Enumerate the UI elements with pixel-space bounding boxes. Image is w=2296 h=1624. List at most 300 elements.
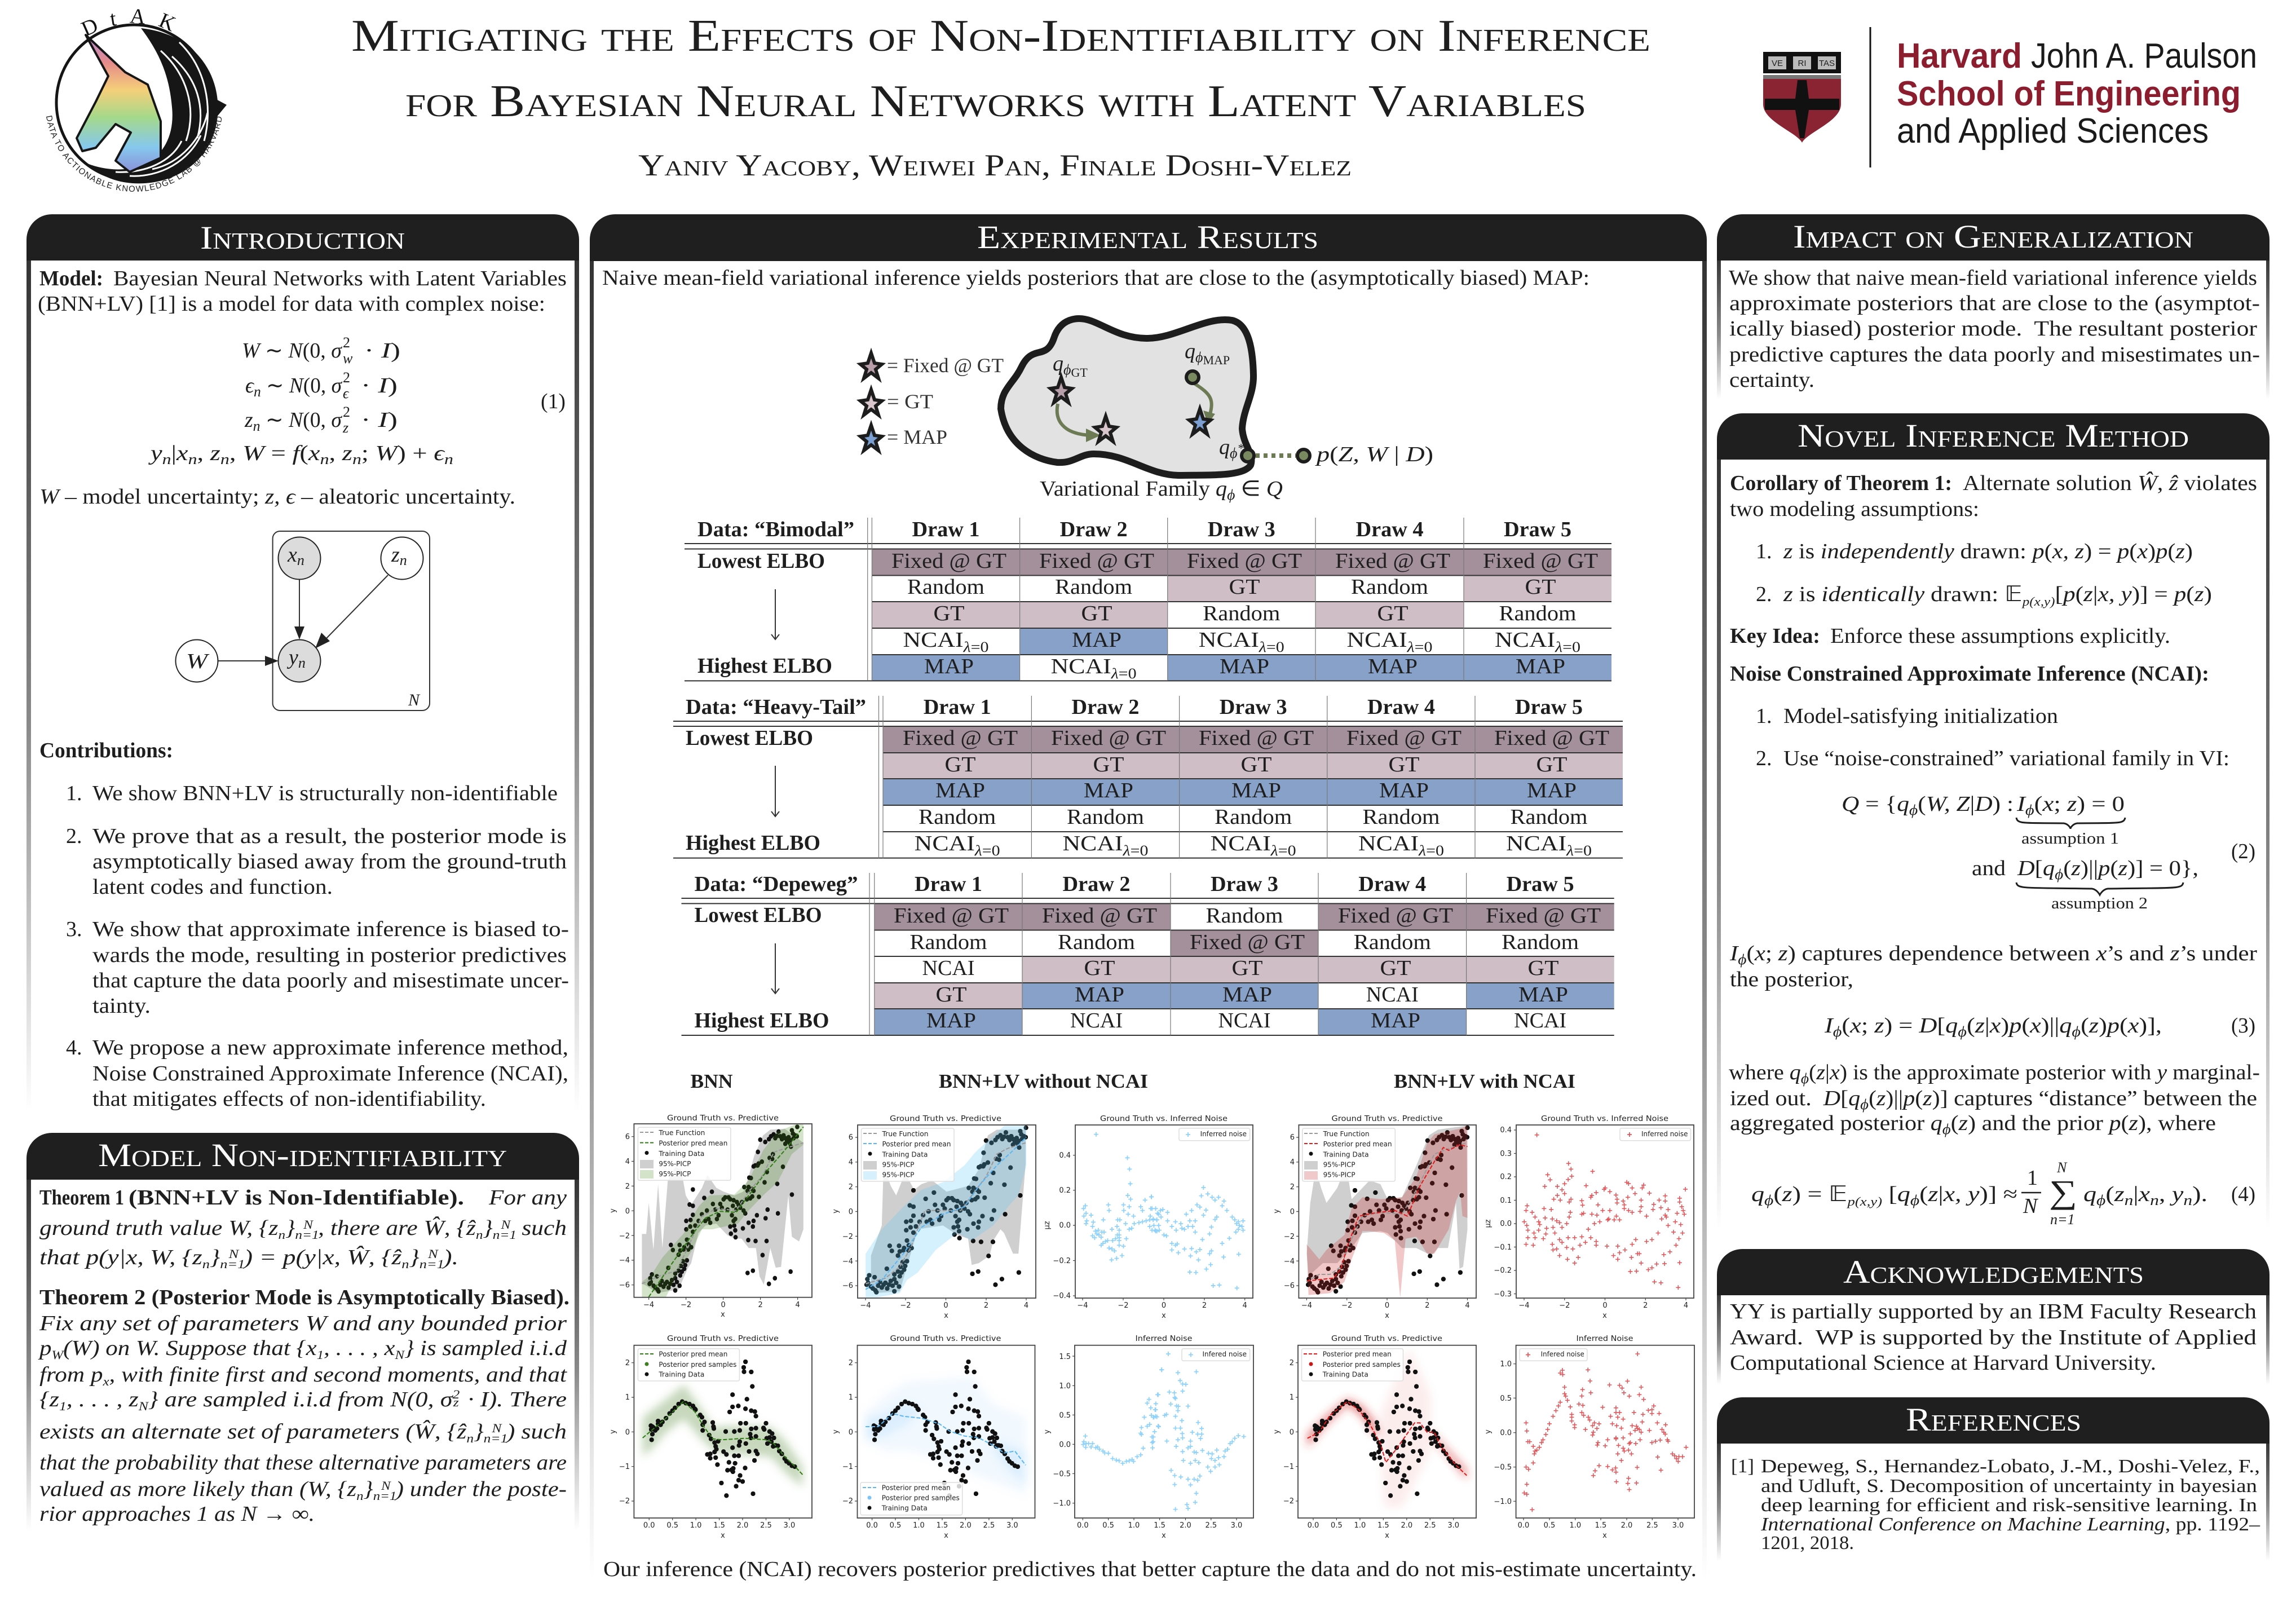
contributions list: asymptotically biased away from the ground-truth <box>92 850 567 873</box>
legend: Inferred noise <box>1641 1129 1688 1138</box>
legend <box>1179 1128 1250 1141</box>
theorem 1: n=1 <box>420 1257 444 1271</box>
theorem 2: ) such <box>505 1420 567 1444</box>
table: Depeweg: GT <box>1231 956 1263 980</box>
chart: with NCAI Depeweg predictive: Ground Truth vs. Predictive <box>1331 1334 1442 1343</box>
contributions list: Noise Constrained Approximate Inference (NCAI), <box>92 1062 568 1085</box>
reference entry: and Udluft, S. Decomposition of uncertainty in bayesian <box>1761 1476 2257 1497</box>
distance text: ( <box>1951 1111 1959 1135</box>
equation 1: ϵ <box>245 374 255 398</box>
table: Bimodal: Random <box>1203 602 1280 625</box>
table: Bimodal: Fixed @ GT <box>1187 549 1302 573</box>
contributions list: tainty. <box>92 994 151 1018</box>
graphical model: W <box>186 650 210 673</box>
equation 4: ϕ <box>1764 1192 1773 1208</box>
equation 4: (4) <box>2231 1182 2255 1206</box>
chart group headings: BNN <box>690 1070 733 1092</box>
mutual information text: the posterior, <box>1730 968 1853 991</box>
contributions list: that capture the data poorly and misestimate uncer- <box>92 969 569 992</box>
table: Depeweg: GT <box>936 983 966 1007</box>
table: Bimodal: MAP <box>1072 628 1121 652</box>
theorem 1: n <box>202 1257 210 1271</box>
diagram labels <box>1040 339 1433 503</box>
graphical model <box>176 531 430 710</box>
theorem 2: , . . . , z <box>67 1388 139 1411</box>
equation 1: W = f(x <box>242 442 318 465</box>
equation 1: (1) <box>541 390 566 413</box>
chart: BNN heavy-tail predictive <box>609 1114 812 1319</box>
equation 1: | <box>171 442 176 465</box>
mutual information text: x; z) captures dependence between x’s and z’s under <box>1755 942 2248 965</box>
table: Bimodal: NCAI <box>903 628 955 652</box>
table: Heavy-Tail: MAP <box>1084 779 1133 802</box>
table: Bimodal: Fixed @ GT <box>1039 549 1154 573</box>
diagram labels: p(Z, W | D) <box>1314 443 1433 466</box>
chart: BNN+LV without NCAI heavy-tail predictive: Ground Truth vs. Predictive <box>890 1114 1001 1123</box>
legend <box>1302 1128 1395 1181</box>
reference entry: deep learning for efficient and risk-sensitive learning. In <box>1761 1495 2257 1516</box>
theorem 2: rior approaches 1 as N → ∞. <box>39 1502 315 1526</box>
equation 1: , <box>229 442 242 465</box>
table: Heavy-Tail: Fixed @ GT <box>1346 726 1462 750</box>
equation 4: 1 <box>2027 1166 2038 1190</box>
contributions heading: Contributions: <box>39 739 173 762</box>
table: Depeweg: Draw 4 <box>1358 872 1426 896</box>
contributions list <box>66 782 569 1111</box>
authors: Yaniv Yacoby, Weiwei Pan, Finale Doshi-Velez <box>638 148 1352 182</box>
theorem 1: N <box>303 1217 314 1232</box>
school name <box>1897 37 2257 151</box>
variational family diagram <box>860 319 1433 503</box>
table: Depeweg: Data: “Depeweg” <box>695 872 858 896</box>
panel: impact on generalization <box>1717 214 2269 399</box>
legend <box>638 1349 739 1381</box>
acknowledgement text: YY is partially supported by an IBM Faculty Research <box>1730 1300 2257 1323</box>
equation 4: ϕ <box>1910 1192 1919 1208</box>
mutual information text <box>1729 942 2257 991</box>
table: Heavy-Tail: Lowest ELBO <box>686 726 813 750</box>
chart: with NCAI inferred noise: 0.1 <box>1500 1197 1512 1205</box>
chart: BNN+LV without NCAI Depeweg predictive: 3.0 <box>1006 1521 1018 1530</box>
chart: with NCAI Depeweg inferred noise: −0.5 <box>1494 1463 1512 1472</box>
theorem 1: ground truth value W, {z <box>39 1216 248 1240</box>
school name: School of Engineering <box>1897 74 2241 113</box>
table: Depeweg: Random <box>1206 904 1283 928</box>
table: Bimodal: Draw 1 <box>912 518 980 541</box>
chart: with NCAI inferred noise: −0.2 <box>1494 1266 1512 1275</box>
panel: references <box>1717 1397 2269 1561</box>
legend <box>1520 1349 1587 1361</box>
chart: with NCAI Depeweg predictive: 2.0 <box>1401 1521 1412 1530</box>
heading: Impact on Generalization <box>1793 218 2193 255</box>
chart: BNN+LV without NCAI Depeweg predictive: 0 <box>849 1428 853 1437</box>
model description: (BNN+LV) [1] is a model for data with complex noise: <box>38 292 545 316</box>
chart: with NCAI Depeweg inferred noise: y <box>1484 1429 1493 1434</box>
equation 4: q <box>1751 1182 1764 1206</box>
distance text: ϕ <box>1942 1121 1951 1137</box>
table: Bimodal: Random <box>907 575 984 599</box>
table: Depeweg: MAP <box>1222 983 1272 1007</box>
equation 1: n <box>254 383 261 400</box>
table: Heavy-Tail: Draw 1 <box>924 695 991 719</box>
equation 1: · I) <box>364 339 400 363</box>
chart: BNN+LV without NCAI Depeweg predictive: 2.0 <box>960 1521 972 1530</box>
legend <box>1620 1128 1690 1141</box>
table: Heavy-Tail: Random <box>1362 805 1440 829</box>
legend <box>1301 1349 1403 1381</box>
table: Bimodal: Draw 4 <box>1355 518 1423 541</box>
chart: BNN+LV without NCAI Depeweg predictive: 0.5 <box>890 1521 901 1530</box>
logo motto: DATA TO ACTIONABLE KNOWLEDGE LAB @ HARVARD <box>46 116 222 192</box>
table: Depeweg: NCAI <box>1514 1009 1566 1032</box>
theorem 1 <box>39 1186 567 1271</box>
legend: Posterior pred mean <box>882 1140 951 1148</box>
unicorn head <box>77 35 161 172</box>
chart: BNN heavy-tail predictive: 4 <box>795 1301 800 1309</box>
chart: BNN+LV without NCAI heavy-tail predictive: x <box>944 1312 948 1320</box>
theorem 2: x <box>102 1374 109 1388</box>
table: Bimodal: NCAI <box>1346 628 1399 652</box>
mutual information text: ( <box>1747 942 1755 965</box>
title <box>351 11 1650 126</box>
table: Heavy-Tail: MAP <box>1231 779 1281 802</box>
chart: BNN+LV without NCAI Depeweg predictive: 2.5 <box>983 1521 995 1530</box>
table: Depeweg: Draw 2 <box>1062 872 1130 896</box>
table: Heavy-Tail: NCAI <box>1062 832 1115 855</box>
theorem 2: , with finite first and second moments, and that <box>109 1363 568 1387</box>
shield: VE <box>1772 59 1783 68</box>
theorem 2: z <box>453 1395 459 1409</box>
chart: BNN+LV with NCAI heavy-tail predictive: −6 <box>1284 1282 1295 1290</box>
theorem 1: } <box>210 1246 220 1269</box>
chart: BNN+LV without NCAI Depeweg predictive: Ground Truth vs. Predictive <box>890 1334 1001 1343</box>
shield <box>1763 52 1841 143</box>
contributions list: We prove that as a result, the posterior mode is <box>92 824 567 848</box>
chart: BNN+LV with NCAI heavy-tail predictive: 0 <box>1290 1208 1295 1216</box>
equation 4: ∑ <box>2049 1173 2077 1210</box>
chart: BNN Depeweg predictive: 0.0 <box>643 1521 655 1530</box>
chart: without NCAI Depeweg inferred noise: 2.0 <box>1180 1521 1191 1530</box>
panel: experimental results <box>590 214 1707 1581</box>
reference entry: International Conference on Machine Learning , pp. 1192– <box>1760 1514 2260 1535</box>
chart: without NCAI Depeweg inferred noise: x <box>1162 1532 1166 1540</box>
table: Depeweg: Draw 3 <box>1211 872 1278 896</box>
diagram labels: ϕ <box>1230 445 1237 461</box>
table: Bimodal: λ=0 <box>1259 639 1282 655</box>
theorem 2: W <box>51 1348 64 1362</box>
legend: Infered noise <box>1541 1350 1584 1358</box>
table: Bimodal: Draw 5 <box>1504 518 1571 541</box>
chart: without NCAI Depeweg inferred noise: Inferred Noise <box>1136 1334 1192 1343</box>
table: Depeweg: Fixed @ GT <box>1486 904 1601 928</box>
chart: without NCAI inferred noise: 0.2 <box>1059 1186 1071 1195</box>
diagram labels: q <box>1053 352 1063 376</box>
equation 4: ϕ <box>2096 1192 2105 1208</box>
NCAI steps: 2. <box>1756 747 1772 770</box>
results conclusion text: Our inference (NCAI) recovers posterior predictives that better capture the data and do not mis-estimate uncertainty. <box>603 1557 1697 1581</box>
equation 4: ( <box>1919 1182 1928 1206</box>
chart: with NCAI inferred noise: Ground Truth vs. Inferred Noise <box>1541 1114 1668 1123</box>
chart: with NCAI Depeweg predictive: −1 <box>1283 1463 1294 1471</box>
chart: BNN+LV with NCAI heavy-tail predictive: y <box>1273 1209 1281 1213</box>
equation 3: ϕ <box>2072 1023 2081 1040</box>
legend: Training Data <box>882 1150 928 1158</box>
theorem 1: n <box>476 1228 483 1242</box>
theorem 1: n=1 <box>295 1228 319 1242</box>
table: Heavy-Tail: GT <box>1388 753 1420 776</box>
chart: BNN+LV with NCAI heavy-tail predictive: 0 <box>1385 1301 1389 1310</box>
contributions list: wards the mode, resulting in posterior predictives <box>92 943 567 967</box>
theorem 1: N <box>427 1247 439 1261</box>
theorem 2: N <box>381 1479 391 1493</box>
table: Bimodal: GT <box>1377 602 1408 625</box>
chart: BNN Depeweg predictive: 1 <box>625 1393 630 1402</box>
equation 4: q <box>1897 1182 1910 1206</box>
legend: Infered noise <box>1202 1350 1247 1358</box>
equation 4: n <box>2150 1192 2159 1208</box>
chart: BNN+LV with NCAI heavy-tail predictive: x <box>1385 1312 1389 1320</box>
NCAI heading: Noise Constrained Approximate Inference (NCAI): <box>1730 662 2209 686</box>
results intro text: Naive mean-field variational inference yields posteriors that are close to the (asymptotically biased) MAP: <box>602 266 1589 290</box>
NCAI steps <box>1756 704 2229 770</box>
mutual information text: I <box>1729 942 1739 965</box>
chart: BNN heavy-tail predictive: 4 <box>625 1158 630 1166</box>
equation 4: N <box>2056 1159 2068 1176</box>
theorem 1: N <box>228 1247 240 1261</box>
theorem 2: } <box>474 1420 484 1444</box>
assumptions list: z is identically drawn: 𝔼 <box>1783 582 2010 606</box>
distance text: ϕ <box>1801 1070 1809 1087</box>
table: Heavy-Tail: Random <box>1510 805 1588 829</box>
table: Heavy-Tail: MAP <box>935 779 985 802</box>
legend: 95%-PICP <box>882 1171 915 1179</box>
equation 1: W) + ϵ <box>375 442 443 465</box>
equation 2: ϕ <box>2025 802 2034 818</box>
theorem 1: ). <box>442 1246 458 1269</box>
equation 1: ∼ <box>261 374 289 398</box>
equation 1: z <box>210 442 220 465</box>
theorem 1: Theorem 1 <box>39 1186 124 1210</box>
chart: with NCAI Depeweg inferred noise: 1.0 <box>1500 1360 1512 1369</box>
table: Heavy-Tail: Draw 3 <box>1220 695 1287 719</box>
chart: with NCAI Depeweg inferred noise: 0.5 <box>1500 1394 1512 1403</box>
table: Bimodal: MAP <box>1220 655 1269 678</box>
chart: with NCAI Depeweg inferred noise <box>1484 1334 1694 1540</box>
chart: with NCAI Depeweg predictive: 1.5 <box>1377 1521 1389 1530</box>
equation 1: ϵ <box>343 385 350 401</box>
title: for Bayesian Neural Networks with Latent Variables <box>405 77 1586 126</box>
chart: BNN heavy-tail predictive: 2 <box>758 1301 763 1309</box>
equation 1: n <box>444 451 453 467</box>
chart: BNN heavy-tail predictive: Ground Truth vs. Predictive <box>667 1114 779 1123</box>
chart: with NCAI Depeweg predictive: 2.5 <box>1424 1521 1436 1530</box>
theorem 2: exists an alternate set of parameters (Ŵ, {ẑ <box>39 1420 409 1444</box>
equation 1: 2 <box>343 404 350 420</box>
table: Bimodal: NCAI <box>1051 655 1103 678</box>
equation 2: W, Z |D) : <box>1926 792 2011 816</box>
theorem 1: that p(y|x, W, {z <box>39 1246 175 1269</box>
legend: True Function <box>1323 1129 1370 1138</box>
corollary: Corollary of Theorem 1: <box>1730 471 1952 495</box>
equation 4: p(x,y) <box>1846 1194 1882 1208</box>
distance text <box>1729 1061 2260 1137</box>
equation 2: ( <box>2034 792 2043 816</box>
panel: novel inference method <box>1717 413 2269 1229</box>
table: Heavy-Tail: Fixed @ GT <box>1494 726 1609 750</box>
equation 2: (2) <box>2231 840 2255 863</box>
diagram labels: ∈ <box>1235 477 1266 501</box>
table: Depeweg: GT <box>1084 956 1115 980</box>
theorem 2: 2 <box>453 1387 460 1401</box>
chart: with NCAI Depeweg predictive: x <box>1385 1532 1389 1540</box>
chart: with NCAI Depeweg predictive: 1.0 <box>1354 1521 1366 1530</box>
table: Depeweg: Highest ELBO <box>695 1009 829 1032</box>
theorem 1: n <box>278 1228 285 1242</box>
chart: BNN+LV without NCAI Depeweg predictive: 2 <box>849 1359 853 1367</box>
assumptions list <box>1756 540 2212 608</box>
chart: BNN+LV with NCAI heavy-tail predictive: 4 <box>1290 1158 1295 1167</box>
chart: without NCAI Depeweg inferred noise: 1.0 <box>1059 1382 1071 1391</box>
table: Bimodal: GT <box>1081 602 1112 625</box>
contributions list: 1. <box>66 782 82 805</box>
chart: BNN Depeweg predictive: 2.5 <box>760 1521 772 1530</box>
graphical model: N <box>408 691 421 709</box>
equation 4: z|x, y )] ≈ <box>1928 1182 2011 1206</box>
chart: BNN+LV without NCAI Depeweg predictive: −1 <box>842 1463 853 1471</box>
distance text: z)||p(z)] captures “distance” between the <box>1876 1087 2226 1110</box>
heading: Acknowledgements <box>1843 1254 2144 1290</box>
table: Heavy-Tail: MAP <box>1527 779 1577 802</box>
chart: with NCAI Depeweg predictive: y <box>1273 1429 1281 1434</box>
legend <box>860 1482 962 1515</box>
diagram labels: ϕ <box>1227 487 1235 503</box>
table: Depeweg: NCAI <box>1070 1009 1123 1032</box>
mutual information text: ϕ <box>1738 951 1747 968</box>
theorem 2: n=1 <box>373 1489 396 1503</box>
theorem 1: (BNN+LV is Non-Identifiable). <box>129 1186 464 1210</box>
chart: with NCAI inferred noise: μz <box>1484 1219 1493 1228</box>
legend: Posterior pred samples <box>659 1360 736 1369</box>
distance text: z) and the prior p(z), where <box>1959 1111 2208 1135</box>
heading: Novel Inference Method <box>1798 417 2189 454</box>
legend: True Function <box>882 1129 928 1138</box>
contributions list: 3. <box>66 917 82 941</box>
model description <box>38 267 567 316</box>
table: Bimodal: λ=0 <box>964 639 986 655</box>
legend: Training Data <box>881 1503 928 1512</box>
chart: BNN Depeweg predictive: 0 <box>625 1428 630 1437</box>
theorem 2: {z <box>39 1388 56 1411</box>
table: Depeweg: MAP <box>926 1009 976 1032</box>
school name: and Applied Sciences <box>1897 112 2209 151</box>
chart: without NCAI Depeweg inferred noise: 0.0 <box>1059 1441 1071 1449</box>
chart: with NCAI Depeweg predictive: 0.0 <box>1308 1521 1319 1530</box>
corollary: two modeling assumptions: <box>1730 497 1979 521</box>
optimization arrows <box>1057 383 1212 435</box>
chart: with NCAI Depeweg predictive: −2 <box>1283 1497 1294 1506</box>
chart: BNN heavy-tail predictive: 0 <box>625 1207 630 1216</box>
equation 2: assumption 2 <box>2051 895 2148 912</box>
table: Bimodal <box>685 518 1611 682</box>
chart: BNN heavy-tail predictive: 0 <box>721 1301 726 1309</box>
theorem 1: N <box>500 1217 511 1232</box>
table: Depeweg: MAP <box>1518 983 1568 1007</box>
panel: model non-identifiability <box>27 1133 579 1531</box>
chart: BNN Depeweg predictive: x <box>721 1532 725 1540</box>
legend: Posterior pred mean <box>659 1139 727 1148</box>
table: Bimodal: Highest ELBO <box>697 654 832 678</box>
key idea: Enforce these assumptions explicitly. <box>1830 624 2170 648</box>
equation 2 <box>1842 792 2255 912</box>
contributions list: We show BNN+LV is structurally non-identifiable <box>92 782 558 805</box>
theorem 1: } <box>409 1246 420 1269</box>
chart: without NCAI Depeweg inferred noise: 0.5 <box>1102 1521 1114 1530</box>
assumptions list: [ <box>2055 582 2063 606</box>
table: Bimodal: Random <box>1055 575 1132 599</box>
chart: with NCAI inferred noise <box>1484 1114 1694 1320</box>
reference entry: [1] <box>1731 1456 1754 1477</box>
graphical model: z <box>391 543 400 567</box>
theorem 1: For any <box>488 1186 567 1210</box>
legend: 95%-PICP <box>659 1170 691 1178</box>
chart: BNN+LV without NCAI Depeweg predictive <box>832 1334 1035 1540</box>
equation 4: N <box>2023 1194 2039 1218</box>
theorem 2: 1 <box>317 1348 324 1362</box>
corollary: Alternate solution Ŵ, ẑ violates <box>1963 471 2257 495</box>
chart: with NCAI Depeweg predictive: 0.5 <box>1331 1521 1343 1530</box>
legend: Posterior pred samples <box>1323 1360 1401 1369</box>
theorem 2: ) under the poste- <box>395 1477 567 1501</box>
equation 1: x <box>176 442 188 465</box>
chart: BNN+LV without NCAI Depeweg predictive: x <box>944 1532 948 1540</box>
equation 4: n=1 <box>2050 1211 2075 1228</box>
equation 1: n <box>220 451 229 467</box>
theorem 2: } are sampled i.i.d from N(0, σ <box>148 1388 453 1411</box>
equation 4: x <box>2138 1182 2150 1206</box>
equation 2: z)||p(z)] = 0}, <box>2071 857 2191 880</box>
theorem 2: N <box>394 1348 405 1362</box>
theorem 2: n=1 <box>484 1431 507 1445</box>
distance text: ϕ <box>1860 1096 1869 1113</box>
heading: Experimental Results <box>977 219 1318 255</box>
legend: Posterior pred samples <box>882 1494 960 1502</box>
star legend: = Fixed @ GT <box>887 354 1004 377</box>
equation 2: ϕ <box>2055 866 2063 882</box>
chart: with NCAI Depeweg predictive: 3.0 <box>1447 1521 1459 1530</box>
diagram labels: q <box>1185 339 1195 363</box>
diagram labels: Q <box>1266 477 1283 501</box>
chart: without NCAI Depeweg inferred noise: −1.0 <box>1053 1499 1071 1508</box>
table: Heavy-Tail: λ=0 <box>1271 842 1293 859</box>
theorem 2: n <box>356 1489 364 1503</box>
table: Heavy-Tail: Draw 2 <box>1071 695 1139 719</box>
table: Heavy-Tail: GT <box>945 753 975 776</box>
chart: without NCAI inferred noise: 0.0 <box>1059 1221 1071 1230</box>
chart: BNN Depeweg predictive: 2 <box>625 1359 630 1367</box>
chart: BNN Depeweg predictive: −2 <box>619 1497 630 1506</box>
logo name: DtAK <box>80 9 176 36</box>
chart: without NCAI Depeweg inferred noise: y <box>1043 1429 1052 1434</box>
distance text: where q <box>1729 1061 1800 1084</box>
chart: with NCAI inferred noise: −0.1 <box>1494 1243 1512 1252</box>
theorem 2: } is sampled i.i.d <box>404 1336 567 1360</box>
contributions list: We show that approximate inference is biased to- <box>92 917 569 941</box>
table: Depeweg: Fixed @ GT <box>1042 904 1157 928</box>
equation 3 <box>1824 1014 2255 1040</box>
heading: Introduction <box>200 219 405 256</box>
theorem 2: from p <box>39 1363 95 1387</box>
chart: BNN heavy-tail predictive: y <box>609 1208 617 1213</box>
